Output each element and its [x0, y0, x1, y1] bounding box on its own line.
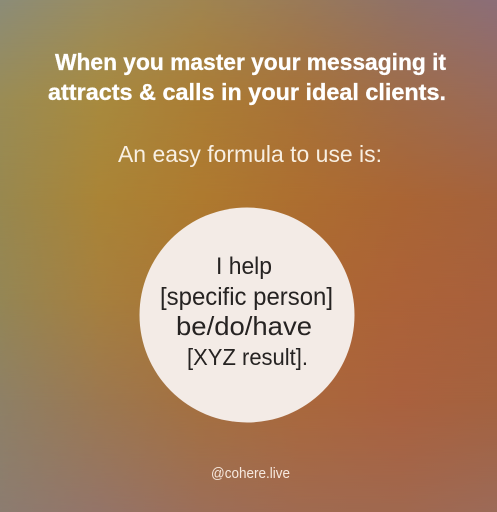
heading	[48, 49, 446, 105]
formula text	[160, 253, 333, 370]
formula text: [XYZ result].	[187, 344, 308, 370]
formula text: be/do/have	[176, 311, 312, 341]
subheading: An easy formula to use is:	[118, 141, 382, 167]
circle with formula	[140, 208, 354, 422]
heading: When you master your messaging it	[55, 49, 446, 75]
handle: @cohere.live	[211, 466, 290, 482]
heading: attracts & calls in your ideal clients.	[48, 79, 446, 105]
formula text: [specific person]	[160, 284, 333, 311]
formula text: I help	[216, 253, 272, 280]
